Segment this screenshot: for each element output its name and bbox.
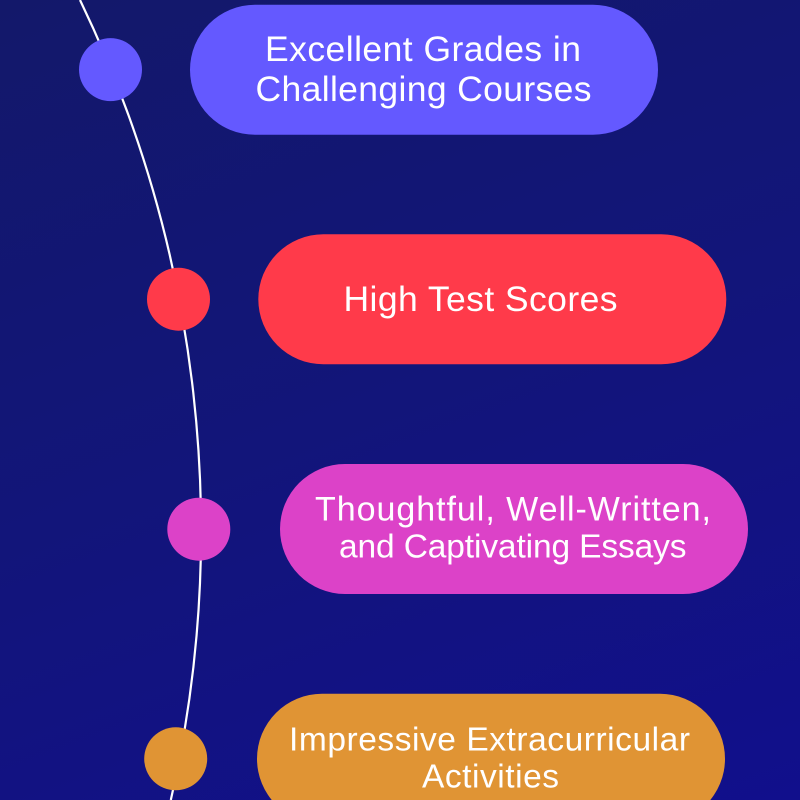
pill: essays: Thoughtful, Well-Written,	[315, 491, 711, 529]
pill: extracurriculars: Impressive Extracurricular	[289, 722, 690, 759]
pill: grades	[190, 5, 658, 135]
dot: essays	[167, 498, 230, 561]
pill: grades: Challenging Courses	[256, 69, 592, 109]
dot: grades	[79, 38, 142, 101]
pill: essays: and Captivating Essays	[339, 528, 686, 566]
pill: test scores	[258, 234, 726, 364]
pill: essays	[280, 464, 748, 594]
dot: test scores	[147, 268, 210, 331]
pill: extracurriculars: Activities	[422, 759, 559, 796]
dot: extracurriculars	[144, 727, 207, 790]
timeline curve	[80, 0, 201, 800]
pill: extracurriculars	[257, 694, 725, 800]
pill: test scores: High Test Scores	[344, 279, 618, 319]
pill: grades: Excellent Grades in	[265, 29, 581, 69]
